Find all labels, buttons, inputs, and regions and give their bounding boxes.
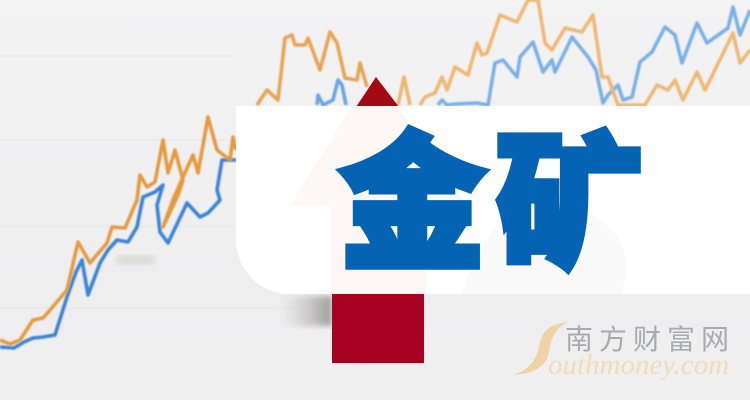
red arrow [356,77,399,107]
smudge [116,255,154,265]
watermark logo: southmoney [513,318,735,381]
white title panel [236,106,750,294]
desk surface [20,338,400,400]
icon: S swoosh [513,322,568,375]
arrow shadow [280,296,332,326]
faint arrow showing through panel [290,106,462,294]
title: 金矿: 矿 [496,123,642,286]
title: 金矿: 金 [340,123,486,286]
logo Chinese name: 南方财富网 [565,318,735,358]
title: 金矿 [335,123,642,286]
logo domain: outhmoney.com [548,349,729,381]
